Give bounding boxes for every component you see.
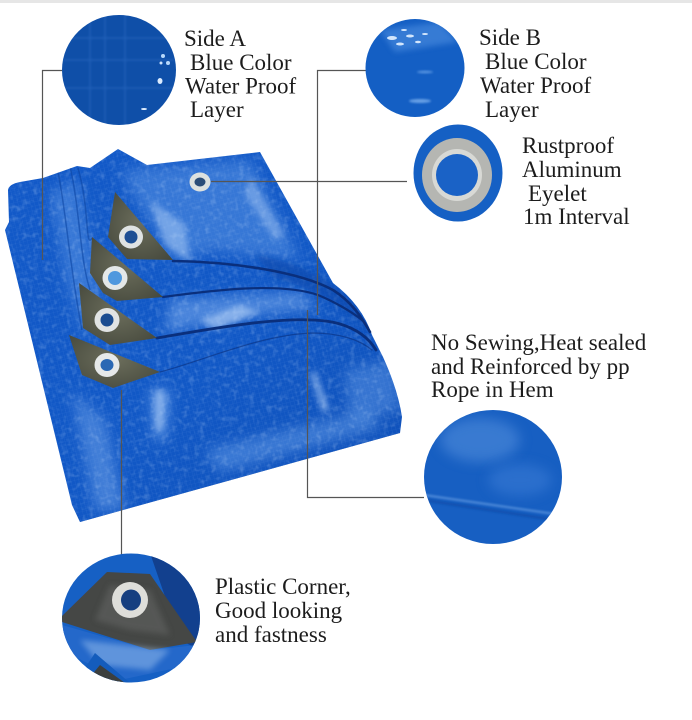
tarp body — [5, 149, 402, 522]
eyelet label: Rustproof — [522, 133, 614, 158]
line to heat seal — [308, 310, 424, 498]
plastic corner label: Good looking — [215, 598, 343, 623]
circle: Side A detail — [62, 15, 176, 125]
circle: plastic corner detail — [60, 553, 200, 683]
eyelet label: 1m Interval — [523, 204, 630, 229]
line to eyelet — [211, 180, 407, 182]
Side A label — [184, 26, 297, 122]
circle: aluminum eyelet detail — [414, 124, 502, 222]
Side B label: Side B — [479, 25, 541, 50]
plastic corner 4 — [69, 335, 160, 388]
plastic corner label — [215, 574, 351, 647]
Side A label: Layer — [190, 97, 244, 122]
Side A label: Water Proof — [185, 74, 297, 98]
circle: heat sealed hem detail — [424, 410, 562, 544]
fold shadows — [157, 261, 376, 372]
tarp highlights and texture — [0, 140, 410, 530]
plastic corner label: Plastic Corner, — [215, 574, 351, 599]
eyelet label: Eyelet — [528, 181, 587, 206]
Side A label: Side A — [184, 26, 246, 51]
eyelet label: Aluminum — [522, 157, 622, 182]
Side A label: Blue Color — [190, 50, 292, 75]
top eyelet — [190, 172, 210, 192]
heat seal label: No Sewing,Heat sealed — [431, 330, 647, 355]
plastic corner label: and fastness — [215, 622, 327, 647]
Side B label — [479, 25, 592, 122]
circle: Side B detail — [366, 19, 464, 117]
Side B label: Layer — [485, 97, 539, 122]
eyelet label — [522, 133, 630, 229]
heat seal label — [431, 330, 647, 402]
connector lines — [42, 70, 424, 555]
Side B label: Blue Color — [485, 49, 587, 74]
heat seal label: and Reinforced by pp — [431, 354, 630, 379]
heat seal label: Rope in Hem — [431, 377, 554, 402]
Side B label: Water Proof — [480, 73, 592, 98]
line to Side B — [318, 70, 366, 315]
tarp illustration — [0, 140, 410, 530]
line to Side A — [42, 70, 62, 260]
plastic corner 3 — [79, 283, 157, 345]
plastic corner 1 — [108, 192, 173, 260]
plastic corner 2 — [90, 237, 163, 301]
top edge strip — [0, 0, 692, 3]
line to plastic corner — [120, 390, 122, 555]
